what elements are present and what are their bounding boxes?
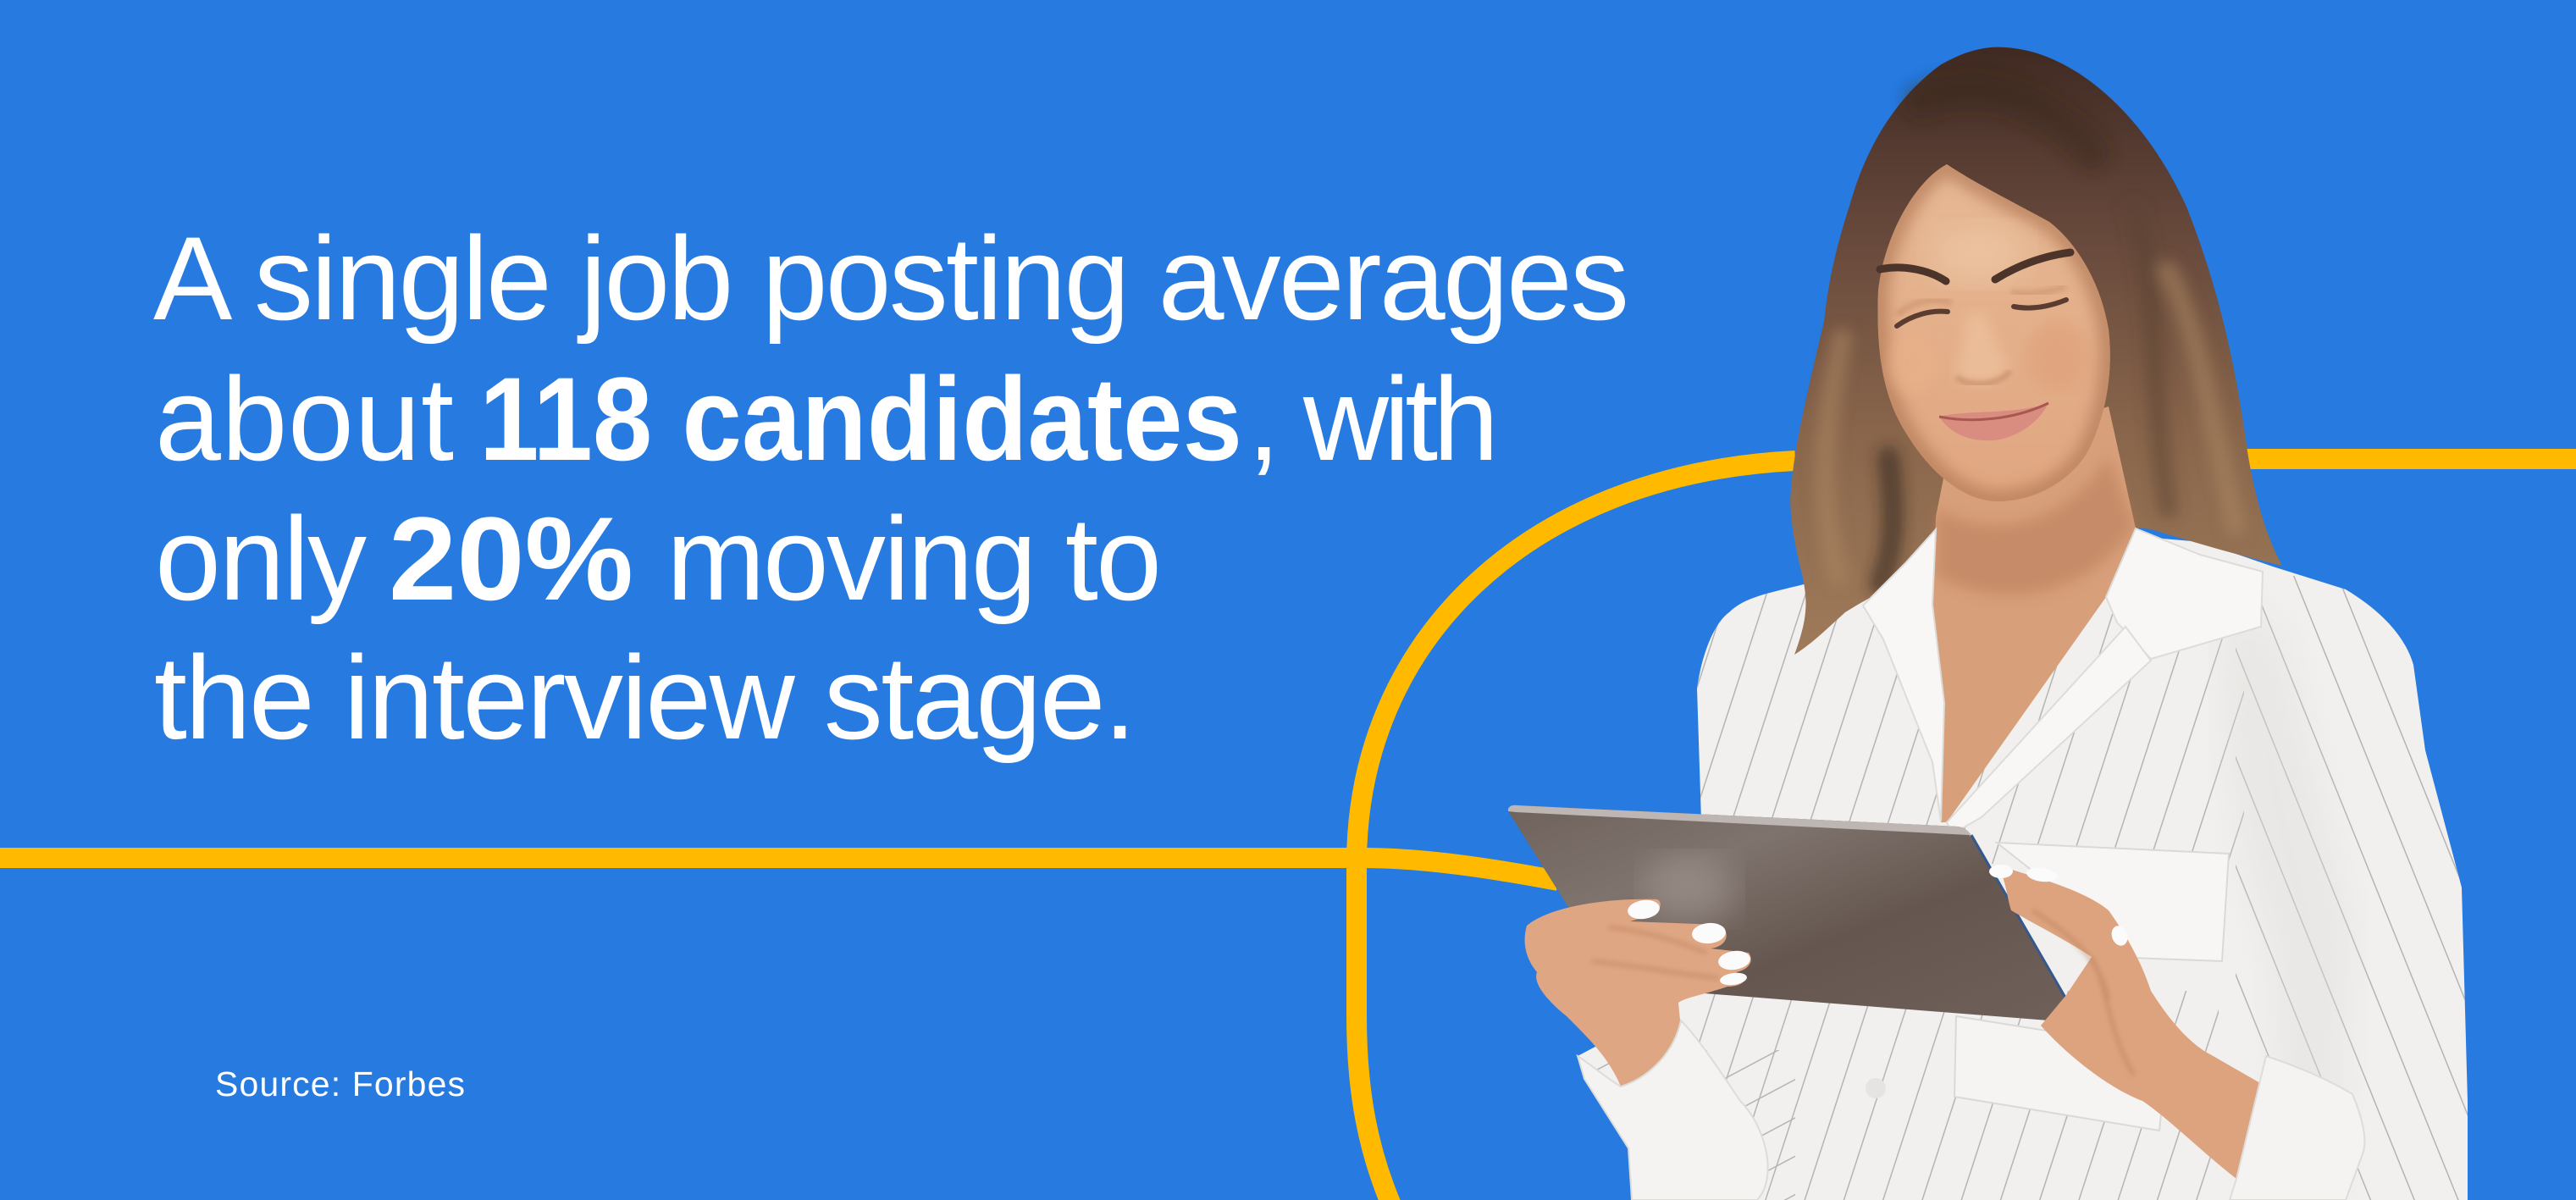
decorative yellow lines [0,459,2576,1200]
collars [1863,528,2263,834]
headline: moving to [666,492,1162,625]
headline: the interview stage. [154,631,1136,764]
headline: 20% [389,492,633,625]
tablet [1508,805,2071,1021]
shirt pocket [1997,843,2229,961]
headline: A single job posting averages [153,212,1629,345]
headline: only [155,492,367,625]
left hand [1525,898,1751,1087]
shirt buttons [1866,1078,1886,1098]
right hand and forearm [1989,865,2266,1179]
shirt cuffs [1578,1020,2364,1200]
photo: woman holding a tablet [1508,47,2473,1200]
headline: 118 candidates [479,352,1242,485]
facial features [1880,252,2070,440]
headline: about [155,352,454,485]
shirt [1575,521,2473,1200]
neck shadow [1936,457,2134,594]
neck and chest [1932,406,2139,822]
hair highlights [1825,91,2236,584]
headline: , with [1247,352,1499,485]
face [1877,164,2110,501]
headline [153,212,1629,764]
source note: Source: Forbes [215,1065,465,1103]
hair back [1790,47,2282,655]
